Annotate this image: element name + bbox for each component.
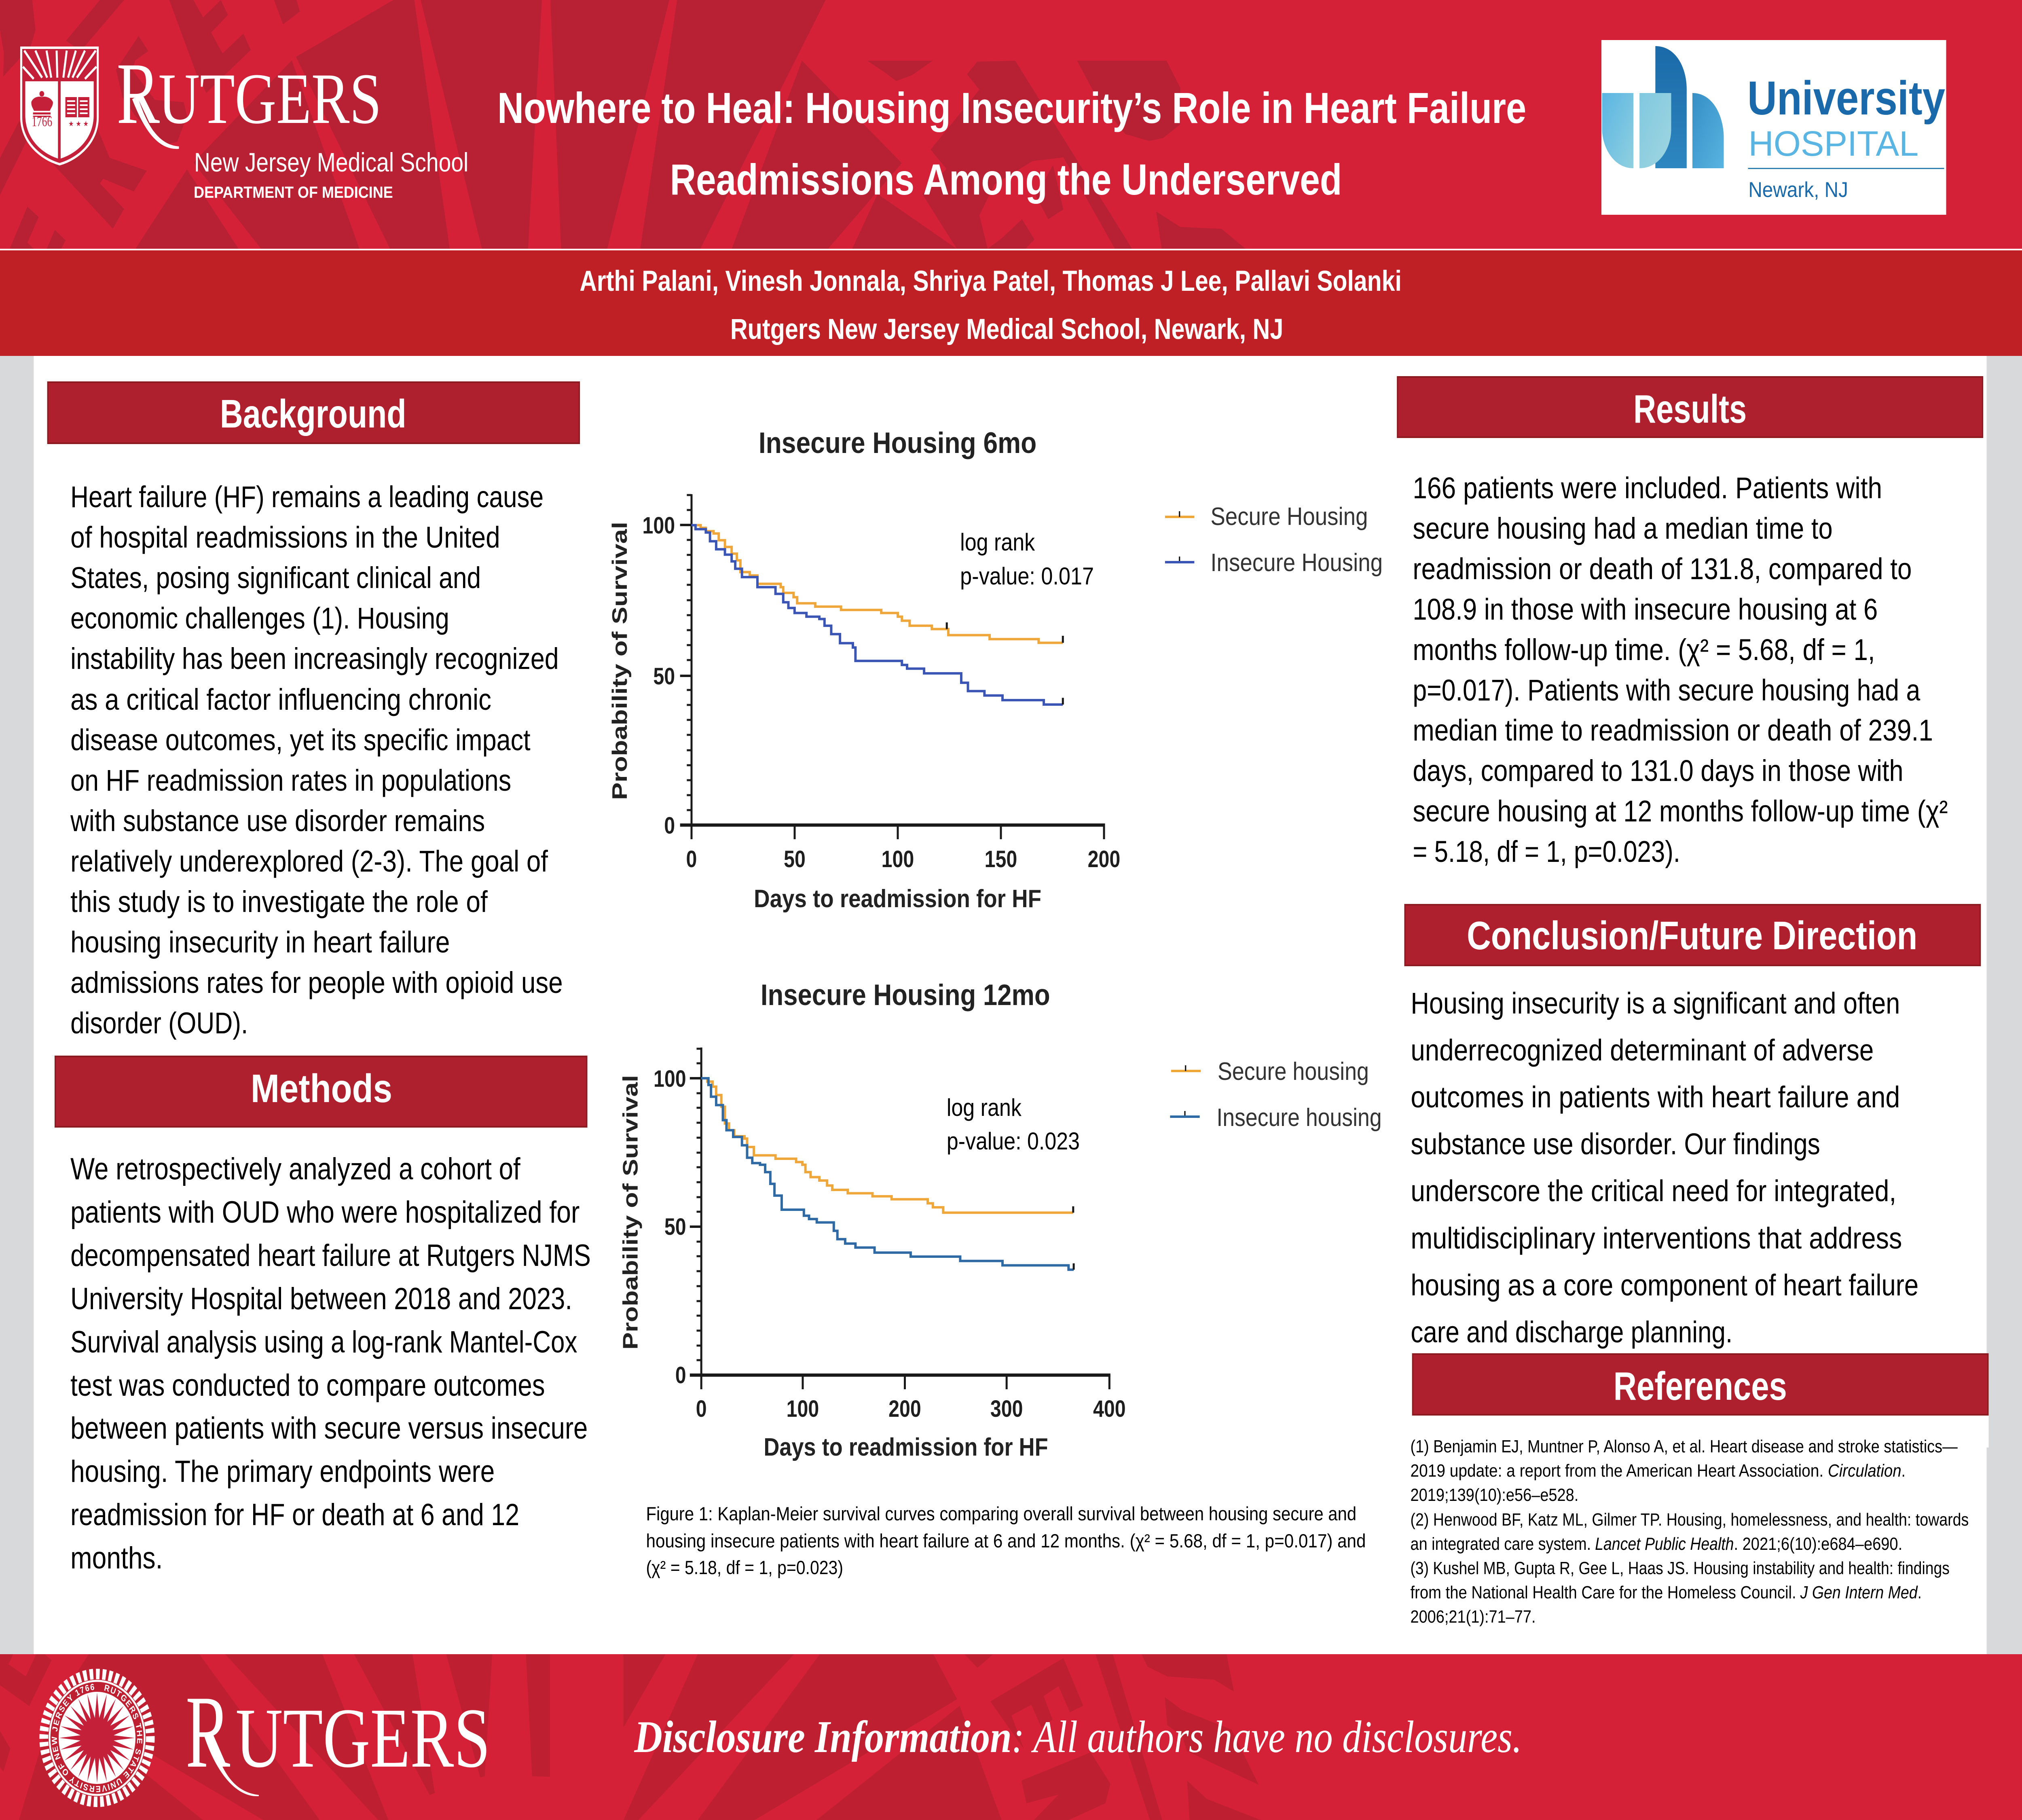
panel: background [48,382,579,1040]
logo: Rutgers wordmark footer: R [186,1674,230,1789]
figure caption: housing insecure patients with heart failure at 6 and 12 months. (χ² = 5.68, df = 1, p=0.017) and [646,1531,1366,1552]
heading: background [48,382,579,443]
text block: background: of hospital readmissions in the United [70,521,500,554]
figure caption: Figure 1: Kaplan-Meier survival curves comparing overall survival between housing secure and [646,1504,1356,1525]
seal ring text: RUTGERS THE STATE UNIVERSITY OF NEW JERSEY 1766 [51,1682,144,1794]
text block: background: relatively underexplored (2-3). The goal of [70,845,548,878]
text block: background: instability has been increasingly recognized [70,642,559,675]
text block: references [1411,1436,1969,1627]
logo: Rutgers wordmark header: DEPARTMENT OF MEDICINE [194,183,393,201]
axis tick labels: 200 [1088,847,1120,872]
axis tick labels: 0 [664,813,675,839]
text block: background: with substance use disorder remains [70,804,485,838]
text block: conclusion [1411,987,1918,1349]
log rank annotation: log rank [960,529,1035,556]
text block: references: Circulation [1828,1460,1901,1481]
disclosure statement [634,1712,1522,1762]
text block: conclusion: multidisciplinary interventions that address [1411,1222,1902,1255]
figure caption [646,1504,1366,1579]
text block: results: = 5.18, df = 1, p=0.023). [1413,835,1680,868]
authors and affiliation: Arthi Palani, Vinesh Jonnala, Shriya Patel, Thomas J Lee, Pallavi Solanki [580,265,1402,297]
text block: results: median time to readmission or death of 239.1 [1413,714,1933,747]
heading: results [1398,377,1982,437]
text block: methods: between patients with secure versus insecure [70,1411,588,1445]
title: Readmissions Among the Underserved [670,155,1342,204]
text block: methods: months. [70,1541,163,1575]
text block: references: 2019 update: a report from the American Heart Association. [1411,1460,1823,1481]
text block: results: secure housing at 12 months follow-up time (χ² [1413,795,1948,828]
figure caption: (χ² = 5.18, df = 1, p=0.023) [646,1558,843,1579]
text block: conclusion: substance use disorder. Our findings [1411,1128,1820,1161]
panel: results [1398,377,1982,868]
text block: references: Lancet Public Health [1595,1534,1734,1554]
log rank annotation [960,529,1094,590]
text block: references: (2) Henwood BF, Katz ML, Gilmer TP. Housing, homelessness, and health: towards [1411,1509,1969,1530]
logo: Rutgers wordmark header: R [116,45,160,142]
heading: methods: Methods [251,1067,392,1111]
text block: background [70,480,563,1040]
log rank annotation: p-value: 0.017 [960,563,1094,590]
logo: Rutgers wordmark header: New Jersey Medical School [194,147,468,177]
x axis title: Days to readmission for HF [764,1433,1048,1461]
text block: background: admissions rates for people with opioid use [70,966,563,999]
text block: results: 108.9 in those with insecure housing at 6 [1413,593,1878,626]
text block: references: an integrated care system. [1411,1534,1591,1554]
text block: conclusion: housing as a core component of heart failure [1411,1269,1918,1302]
log rank annotation: log rank [947,1094,1022,1121]
text block: methods: housing. The primary endpoints were [70,1454,495,1488]
logo: Rutgers wordmark footer: UTGERS [235,1691,490,1786]
seal sun rays [59,1693,135,1783]
text block: references: . 2021;6(10):e684–e690. [1734,1534,1902,1554]
text block: results: months follow-up time. (χ² = 5.68, df = 1, [1413,633,1875,667]
text block: references: (1) Benjamin EJ, Muntner P, Alonso A, et al. Heart disease and stroke statistics— [1411,1436,1958,1456]
legend [1170,1058,1382,1132]
text block: results: readmission or death of 131.8, compared to [1413,552,1912,586]
panel: conclusion [1405,905,1980,1349]
text block: methods: Survival analysis using a log-rank Mantel-Cox [70,1325,577,1359]
text block: background: as a critical factor influencing chronic [70,683,491,716]
title [497,84,1526,204]
logo: University Hospital: HOSPITAL [1748,124,1918,163]
axis tick labels: 0 [675,1363,686,1388]
text block: references: (3) Kushel MB, Gupta R, Gee L, Haas JS. Housing instability and health: findings [1411,1558,1950,1578]
y axis title: Probability of Survival [619,1075,642,1350]
text block: references: . [1901,1460,1906,1481]
logo: University Hospital [1601,40,1946,215]
text block: results: days, compared to 131.0 days in those with [1413,754,1904,787]
text block: background: States, posing significant clinical and [70,561,481,595]
axis tick labels [654,1066,1126,1422]
axis tick labels: 50 [653,664,675,690]
axis tick labels: 100 [654,1066,686,1092]
chart: insecure housing 6 months [608,427,1383,913]
axes and ticks [680,494,1105,839]
panel: references [1411,1354,1988,1627]
text block: references: 2006;21(1):71–77. [1411,1606,1536,1627]
legend: Secure Housing [1210,503,1368,531]
axis tick labels: 50 [784,847,806,872]
logo: Rutgers seal [44,1674,150,1802]
axis tick labels: 0 [696,1396,707,1422]
heading: methods [55,1056,587,1127]
heading: conclusion [1405,905,1980,965]
text block: results: 166 patients were included. Patients with [1413,472,1882,505]
authors and affiliation: Rutgers New Jersey Medical School, Newark, NJ [730,313,1283,345]
heading: references: References [1614,1364,1787,1409]
shield stars: ★ ★ ★ [68,120,89,128]
logo: Rutgers wordmark footer [186,1674,490,1796]
chart title: Insecure Housing 12mo [761,979,1050,1012]
logo: Rutgers shield [21,48,98,164]
text block: references: from the National Health Care for the Homeless Council. [1411,1582,1796,1602]
text block: methods: decompensated heart failure at Rutgers NJMS [70,1238,591,1272]
text block: background: disease outcomes, yet its specific impact [70,724,531,757]
legend: Secure housing [1218,1058,1369,1086]
icon: open book [66,97,89,117]
logo: Rutgers wordmark header: UTGERS [159,58,381,139]
text block: conclusion: underrecognized determinant of adverse [1411,1034,1874,1067]
text block: conclusion: underscore the critical need for integrated, [1411,1175,1896,1208]
panel: methods [55,1056,591,1575]
text block: background: this study is to investigate the role of [70,885,488,918]
footer banner [0,1654,2022,1820]
text block: background: disorder (OUD). [70,1007,248,1040]
text block: background: housing insecurity in heart failure [70,926,450,959]
icon: crown [31,91,53,117]
text block: methods: test was conducted to compare outcomes [70,1368,545,1402]
text block: references: J Gen Intern Med [1800,1582,1918,1602]
axis tick labels: 50 [664,1214,686,1240]
axis tick labels [643,513,1120,872]
chart: insecure housing 12 months [619,979,1382,1461]
y axis title: Probability of Survival [608,522,632,800]
legend: Insecure Housing [1210,549,1383,577]
axis tick labels: 100 [882,847,914,872]
heading: references [1413,1354,1988,1415]
legend [1165,503,1383,577]
shield year: 1766 [32,113,52,130]
axis tick labels: 100 [787,1396,819,1422]
text block: references: . [1918,1582,1922,1602]
text block: background: on HF readmission rates in populations [70,764,511,797]
heading: results: Results [1633,387,1747,432]
axis tick labels: 400 [1093,1396,1126,1422]
survival curves [701,1078,1074,1270]
text block: conclusion: outcomes in patients with heart failure and [1411,1081,1900,1114]
title: Nowhere to Heal: Housing Insecurity’s Role in Heart Failure [497,84,1526,133]
axis tick labels: 0 [686,847,697,872]
survival curves [692,525,1063,705]
log rank annotation: p-value: 0.023 [947,1128,1080,1155]
text block: methods: readmission for HF or death at 6 and 12 [70,1498,519,1532]
logo: Rutgers wordmark header [116,45,468,201]
header banner [0,0,2022,356]
authors and affiliation [580,265,1402,345]
text block: background: economic challenges (1). Housing [70,602,449,635]
axes and ticks [690,1048,1110,1389]
axis tick labels: 150 [985,847,1017,872]
text block: references: 2019;139(10):e56–e528. [1411,1485,1578,1505]
logo: University Hospital: Newark, NJ [1748,178,1848,202]
chart title: Insecure Housing 6mo [759,427,1036,459]
text block: results: secure housing had a median time to [1413,512,1833,545]
text block: methods: We retrospectively analyzed a cohort of [70,1152,520,1186]
log rank annotation [947,1094,1080,1155]
text block: conclusion: Housing insecurity is a significant and often [1411,987,1900,1020]
text block: background: Heart failure (HF) remains a leading cause [70,480,544,514]
text block: methods: University Hospital between 2018 and 2023. [70,1282,572,1316]
text block: results: p=0.017). Patients with secure housing had a [1413,674,1920,707]
text block: methods [70,1152,591,1575]
disclosure statement: Disclosure Information [634,1712,1012,1762]
disclosure statement: : All authors have no disclosures. [1012,1712,1522,1762]
logo: University Hospital: University [1747,72,1945,125]
text block: conclusion: care and discharge planning. [1411,1316,1732,1349]
text block: methods: patients with OUD who were hospitalized for [70,1195,580,1229]
x axis title: Days to readmission for HF [754,885,1041,913]
axis tick labels: 100 [643,513,675,539]
legend: Insecure housing [1216,1104,1382,1132]
heading: background: Background [220,392,406,436]
heading: conclusion: Conclusion/Future Direction [1467,914,1917,958]
text block: results [1413,472,1948,868]
axis tick labels: 300 [990,1396,1023,1422]
axis tick labels: 200 [888,1396,921,1422]
